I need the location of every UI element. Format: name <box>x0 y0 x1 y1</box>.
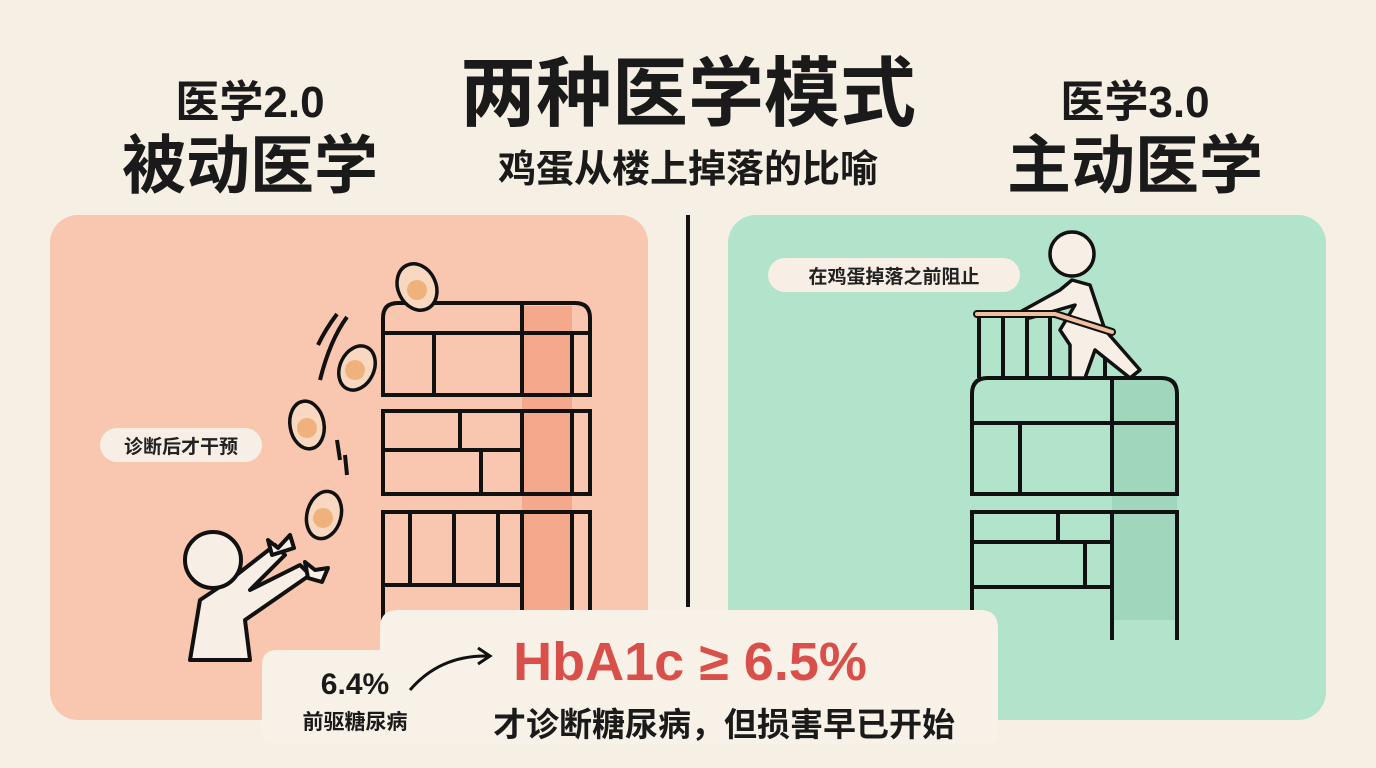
left heading: 被动医学 <box>122 130 378 202</box>
illustration: right building with railing <box>972 318 1177 640</box>
callout text: prediabetes: 6.4% <box>321 668 389 701</box>
left heading <box>122 78 378 202</box>
callout text: prediabetes: 前驱糖尿病 <box>302 711 408 734</box>
panel: passive medicine <box>50 215 648 720</box>
callout text: diagnosis note: 才诊断糖尿病，但损害早已开始 <box>493 706 955 743</box>
subtitle: 鸡蛋从楼上掉落的比喻 <box>498 149 878 191</box>
label: diagnose then intervene <box>100 428 262 462</box>
arrow <box>410 656 488 690</box>
label: stop before egg falls: 在鸡蛋掉落之前阻止 <box>808 266 980 288</box>
left heading: 医学2.0 <box>175 78 325 127</box>
panel: proactive medicine <box>728 215 1326 720</box>
icon: person catching <box>185 532 328 660</box>
label: stop before egg falls <box>768 258 1020 292</box>
callout text: prediabetes <box>302 668 408 734</box>
icon: eggs <box>286 257 444 543</box>
right heading: 医学3.0 <box>1060 78 1210 127</box>
right heading <box>1007 78 1263 202</box>
callout text: HbA1c: HbA1c ≥ 6.5% <box>513 632 867 692</box>
label: diagnose then intervene: 诊断后才干预 <box>124 436 238 458</box>
right heading: 主动医学 <box>1007 130 1263 202</box>
callout box <box>262 610 998 745</box>
title: 两种医学模式 <box>460 52 916 137</box>
divider line <box>686 215 690 607</box>
